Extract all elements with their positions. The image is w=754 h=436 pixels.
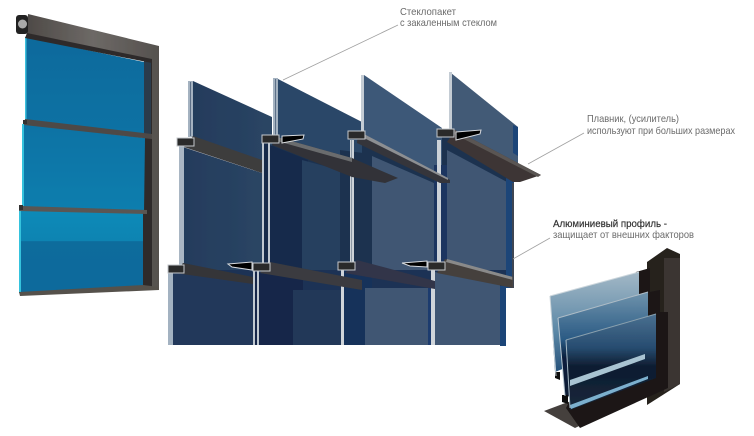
leader lines (283, 25, 584, 259)
glass backing (262, 135, 514, 288)
callout: glass unit: с закаленным стеклом (400, 17, 497, 29)
callout: aluminium profile: Алюминиевый профиль - (553, 218, 667, 230)
callout: glass unit (400, 6, 497, 29)
callout: aluminium profile (553, 218, 694, 241)
bottom row glass (168, 270, 506, 346)
callout: aluminium profile: защищает от внешних факторов (553, 229, 694, 241)
central facade: glass panels and fins (168, 72, 541, 346)
horizontal fins (175, 130, 541, 290)
mullion nodes and fin cross-sections (168, 129, 481, 273)
callout: glass unit: Стеклопакет (400, 6, 456, 18)
left window illustration (16, 14, 159, 296)
top row glass (188, 72, 518, 178)
middle row glass (179, 140, 514, 288)
callout: fin (587, 113, 736, 137)
callout: fin: используют при больших размерах (587, 125, 736, 137)
insulated glass unit cross-section (544, 248, 680, 428)
callout: fin: Плавник, (усилитель) (587, 113, 679, 125)
